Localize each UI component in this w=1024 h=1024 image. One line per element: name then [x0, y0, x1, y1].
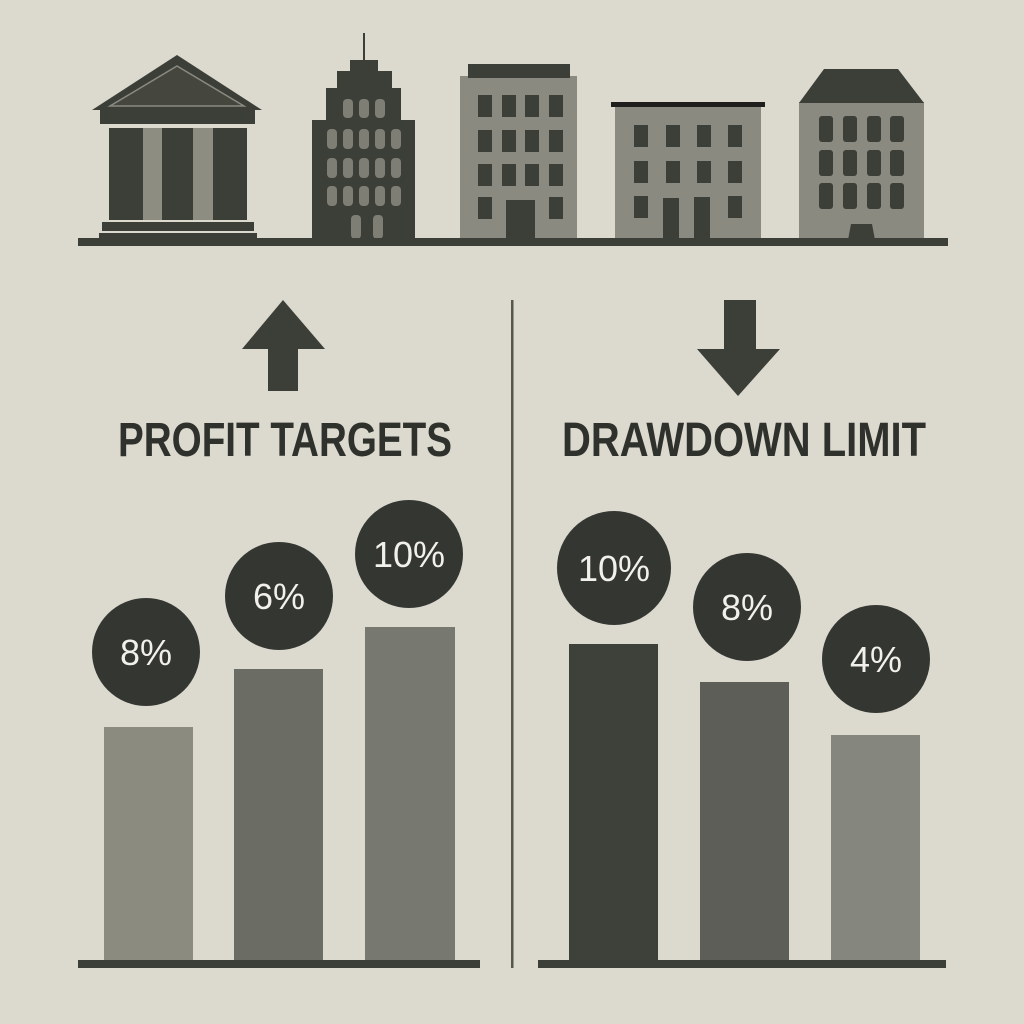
building: apartment — [611, 102, 765, 240]
chart: profit targets: 6% — [253, 576, 305, 617]
building: office — [460, 64, 577, 240]
chart: profit targets: 10% — [373, 534, 445, 575]
icon: down arrow — [697, 300, 780, 396]
skyline — [78, 33, 948, 246]
chart: drawdown limit: 4% — [850, 639, 902, 680]
building: skyscraper — [312, 33, 415, 240]
heading: drawdown limit: DRAWDOWN LIMIT — [562, 414, 926, 467]
divider — [511, 300, 514, 968]
ground line — [78, 238, 948, 246]
building: temple — [92, 55, 262, 240]
chart: drawdown limit — [538, 511, 946, 968]
chart: profit targets — [78, 500, 480, 968]
chart: drawdown limit: 8% — [721, 587, 773, 628]
heading: profit targets: PROFIT TARGETS — [118, 414, 452, 467]
chart: drawdown limit: 10% — [578, 548, 650, 589]
chart: profit targets: 8% — [120, 632, 172, 673]
building: mansard house — [799, 69, 924, 240]
icon: up arrow — [242, 300, 325, 391]
